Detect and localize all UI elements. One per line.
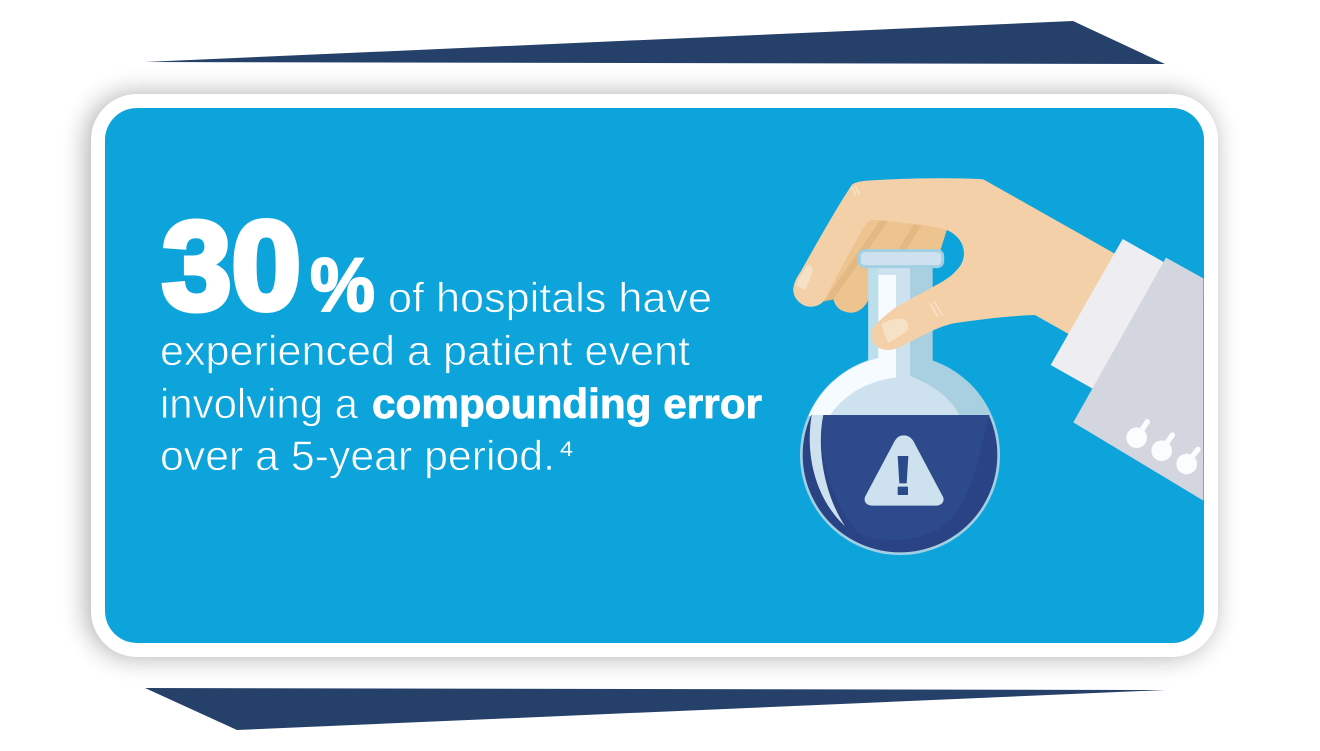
flask rim [859, 251, 943, 267]
shirt cuff [1051, 239, 1166, 390]
line 4: over a 5-year period. [160, 432, 555, 479]
sleeve buttons [1126, 422, 1198, 474]
glass reflection [810, 415, 845, 526]
glass right shoulder [910, 355, 1013, 416]
sleeve [1073, 258, 1203, 501]
body text [160, 274, 762, 479]
back fingers [817, 215, 948, 313]
headline statistic [162, 197, 375, 336]
illustration: flask and hand [780, 178, 1203, 582]
statistic: percent sign: % [310, 243, 375, 328]
top banner shape [145, 21, 1165, 64]
line 2: experienced a patient event [160, 327, 690, 374]
glass shoulders [808, 358, 960, 416]
flask body [800, 268, 1000, 555]
card shadow [87, 94, 1214, 657]
line 3 emphasis: compounding error [372, 380, 762, 427]
hand [793, 178, 1120, 350]
liquid [802, 415, 998, 552]
icon: warning triangle [865, 435, 944, 506]
card: outer white frame [91, 94, 1218, 657]
line 3: involving a [160, 380, 359, 427]
flask neck [868, 260, 933, 380]
glass highlight [808, 358, 890, 416]
finger creases [852, 186, 943, 317]
fingernails [796, 265, 908, 343]
footnote marker: 4 [560, 438, 573, 461]
statistic: 30: 30 [162, 197, 301, 336]
card: blue panel [105, 108, 1204, 643]
line 1: of hospitals have [388, 274, 712, 321]
glass mid tone [830, 376, 960, 416]
bottom banner shape [145, 688, 1165, 730]
